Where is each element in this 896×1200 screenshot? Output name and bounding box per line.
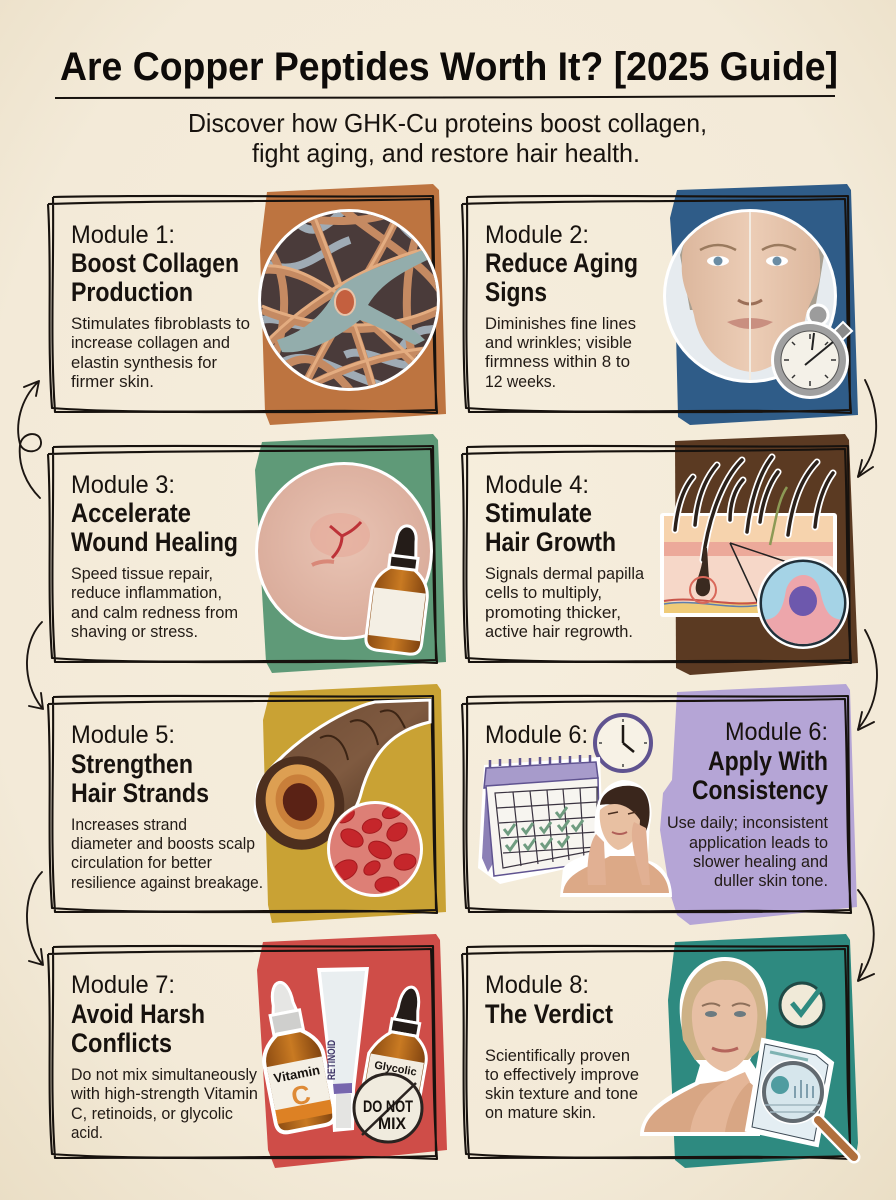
text: module 2 — [485, 221, 638, 391]
text: module 3: and calm redness from — [71, 603, 238, 622]
icon: vitamin C bottle: C — [289, 1079, 313, 1112]
text: module 2: Diminishes fine lines — [485, 314, 636, 333]
text: module 5: circulation for better — [71, 853, 212, 872]
text: module 8: to effectively improve — [485, 1065, 639, 1084]
panel: module 3 — [48, 434, 446, 673]
text: module 7: with high-strength Vitamin — [70, 1084, 258, 1103]
panel: module 4 — [462, 434, 858, 675]
sketch frame — [48, 446, 437, 663]
text: module 5: diameter and boosts scalp — [71, 834, 255, 853]
color patch: teal — [668, 934, 858, 1168]
text: module 7: C, retinoids, or glycolic — [71, 1104, 233, 1123]
text: module 8 — [485, 971, 639, 1122]
sketch frame — [462, 446, 851, 663]
text: module 5: Hair Strands — [71, 778, 209, 808]
icon: retinoid cream tube: RETINOID — [326, 1040, 338, 1080]
text: module 7: acid. — [71, 1123, 103, 1142]
text: module 8: Scientifically proven — [485, 1046, 630, 1065]
icon: hair follicle skin cross-section — [660, 457, 837, 617]
icon: checkmark badge — [780, 981, 826, 1027]
icon: retinoid cream tube — [317, 967, 369, 1132]
icon: serum dropper bottle — [365, 523, 436, 655]
subtitle: Discover how GHK-Cu proteins boost collagen, — [188, 108, 707, 138]
panel: module 1 — [48, 184, 446, 425]
text: module 4: active hair regrowth. — [485, 622, 633, 641]
icon: mature woman portrait — [640, 957, 768, 1136]
text: module 5: resilience against breakage. — [71, 873, 263, 892]
icon: glycolic acid bottle: Acid — [383, 1074, 404, 1088]
text: module 6: slower healing and — [693, 852, 828, 871]
icon: vitamin C bottle: Vitamin — [272, 1062, 321, 1086]
text: module 2: and wrinkles; visible — [485, 333, 632, 352]
text: module 3: Accelerate — [71, 498, 191, 528]
text: module 2: 12 weeks. — [485, 372, 556, 391]
icon: wall clock — [595, 715, 651, 771]
text: module 1 — [71, 221, 250, 391]
text: module 3: Speed tissue repair, — [71, 564, 213, 583]
subtitle: fight aging, and restore hair health. — [252, 138, 640, 168]
panel: module 5 — [48, 684, 446, 923]
icon: stopwatch — [771, 305, 852, 399]
icon: glycolic acid bottle: Glycolic — [373, 1059, 418, 1079]
panel: module 2 — [462, 184, 858, 425]
text: module 8: The Verdict — [485, 999, 613, 1029]
sketch frame — [48, 196, 437, 413]
text: module 4: promoting thicker, — [485, 603, 621, 622]
arrow: module 4 down to module 6 — [858, 630, 877, 730]
text: module 5 — [71, 721, 263, 892]
text: module 3: Wound Healing — [71, 527, 238, 557]
icon: hair strand cross-section — [244, 700, 430, 861]
text: module 1: elastin synthesis for — [71, 353, 217, 372]
icon: healing wound on skin — [255, 462, 433, 640]
text: module 3: reduce inflammation, — [71, 583, 222, 602]
text: module 5: Increases strand — [71, 815, 187, 834]
title: Are Copper Peptides Worth It? [2025 Guide] — [60, 45, 838, 89]
text: module 4: cells to multiply, — [485, 583, 602, 602]
arrow: module 3 down to module 5 — [27, 622, 43, 709]
text: module 7: Module 7: — [71, 971, 175, 999]
text: module 6: duller skin tone. — [714, 871, 828, 890]
text: module 2: Signs — [485, 277, 547, 307]
text: module 4: Module 4: — [485, 471, 589, 499]
icon: red blood cells — [327, 801, 423, 897]
stamp: do not mix: DO NOT — [363, 1097, 413, 1116]
panel: module 6 — [462, 684, 857, 925]
panel: module 8 — [462, 934, 858, 1168]
text: module 4: Hair Growth — [485, 527, 616, 557]
sketch frame — [48, 946, 437, 1159]
sketch frame — [462, 946, 851, 1159]
sketch frame — [462, 696, 851, 913]
text: module 6 — [667, 718, 828, 890]
text: module 1: increase collagen and — [71, 333, 230, 352]
icon: glycolic acid bottle — [360, 982, 438, 1114]
text: module 1: Stimulates fibroblasts to — [71, 314, 250, 333]
subtitle — [188, 108, 707, 168]
text: module 4 — [485, 471, 645, 641]
sketch frame — [48, 696, 437, 913]
color patch: orange — [260, 184, 446, 425]
text: module 7: Do not mix simultaneously — [71, 1065, 257, 1084]
text: module 5: Strengthen — [71, 749, 193, 779]
color patch: mustard — [263, 684, 446, 923]
icon: calendar with checkmarks — [478, 755, 604, 884]
text: module 1: firmer skin. — [71, 372, 154, 391]
text: module 2: Reduce Aging — [485, 248, 638, 278]
text: module 3 — [71, 471, 238, 641]
arrow: module 6 down to module 8 — [858, 890, 874, 981]
text: module 4: Stimulate — [485, 498, 592, 528]
stamp: do not mix: MIX — [378, 1114, 407, 1133]
arrow: module 5 down to module 7 — [27, 872, 43, 965]
text: module 2: Module 2: — [485, 221, 589, 249]
color patch: green — [255, 434, 446, 673]
color patch: red — [257, 934, 447, 1168]
text: module 3: shaving or stress. — [71, 622, 198, 641]
color patch: blue — [670, 184, 858, 425]
text: module 6: application leads to — [689, 833, 828, 852]
text: module 4: Signals dermal papilla — [485, 564, 645, 583]
icon: vitamin C bottle — [250, 977, 337, 1134]
text: module 6: Apply With — [708, 746, 828, 776]
text: module 2: firmness within 8 to — [485, 352, 630, 371]
icon: woman applying serum — [560, 780, 672, 897]
text: module 6: Module 6: — [725, 718, 828, 746]
color patch: brown — [675, 434, 858, 675]
text: module 6: Consistency — [692, 775, 828, 805]
color patch: lavender — [660, 684, 857, 925]
icon: collagen fibre micrograph — [255, 205, 445, 395]
text: module 6: Use daily; inconsistent — [667, 813, 828, 832]
arrow: module 3 up to module 1 — [18, 381, 41, 498]
text: module 1: Module 1: — [71, 221, 175, 249]
icon: face before and after — [663, 205, 837, 383]
text: module 5: Module 5: — [71, 721, 175, 749]
panel: module 7 — [48, 934, 447, 1168]
text: module 6 left heading: Module 6: — [485, 721, 588, 749]
text: module 8: on mature skin. — [485, 1103, 596, 1122]
stamp: do not mix — [354, 1074, 422, 1142]
text: module 8: Module 8: — [485, 971, 589, 999]
icon: dermal papilla magnified — [757, 557, 849, 650]
text: module 1: Boost Collagen — [71, 248, 239, 278]
text: module 1: Production — [71, 277, 193, 307]
text: module 7: Conflicts — [71, 1028, 172, 1058]
arrow: module 2 down to module 4 — [858, 380, 876, 477]
text: module 3: Module 3: — [71, 471, 175, 499]
text: module 8: skin texture and tone — [485, 1084, 638, 1103]
text: module 7: Avoid Harsh — [71, 999, 205, 1029]
sketch frame — [462, 196, 851, 413]
icon: report with magnifier — [747, 1040, 854, 1157]
text: module 7 — [70, 971, 258, 1142]
